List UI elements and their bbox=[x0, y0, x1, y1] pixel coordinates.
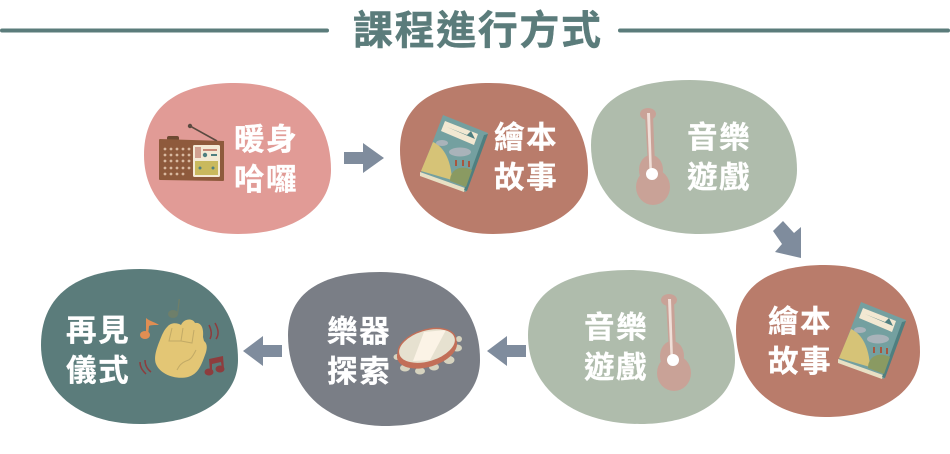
icon: faint note bbox=[168, 299, 180, 318]
title rule left bbox=[0, 28, 329, 32]
label: goodbye ritual: 儀式 bbox=[66, 354, 130, 388]
label: music game 2: 遊戲 bbox=[584, 351, 648, 385]
icon: book 2 bbox=[838, 302, 906, 379]
icon: ukulele 2 bbox=[657, 294, 691, 391]
step: instrument exploration bbox=[288, 272, 480, 426]
icon: radio bbox=[159, 124, 224, 181]
label: instrument exploration: 探索 bbox=[327, 355, 391, 389]
arrow: down-right bbox=[773, 221, 801, 258]
step: music game 2 bbox=[528, 270, 735, 424]
icon: orange note bbox=[140, 318, 159, 339]
step: warm-up greeting bbox=[144, 83, 331, 234]
blob: picture book 2 bbox=[736, 265, 920, 417]
icon: book bbox=[420, 115, 488, 192]
label: goodbye ritual: 再見 bbox=[66, 314, 130, 348]
title rule right bbox=[618, 28, 950, 32]
blob: picture book bbox=[400, 83, 588, 234]
label: picture book 2: 繪本 bbox=[768, 305, 832, 339]
blob: music game 2 bbox=[528, 270, 735, 424]
blob: goodbye ritual bbox=[41, 269, 238, 424]
arrow: right bbox=[344, 143, 384, 173]
label: warm-up: 暖身 bbox=[234, 123, 298, 157]
blob: music game bbox=[591, 80, 797, 234]
icon: ukulele bbox=[636, 108, 670, 205]
icon: tambourine bbox=[392, 322, 462, 375]
step: picture book bbox=[400, 83, 588, 234]
icon: motion lines right bbox=[209, 323, 218, 339]
label: picture book: 繪本 bbox=[494, 121, 558, 155]
label: picture book 2: 故事 bbox=[768, 345, 832, 379]
icon: motion lines left bbox=[140, 360, 151, 374]
icon: clapping hand bbox=[155, 319, 207, 378]
step: music game bbox=[591, 80, 797, 234]
arrow: left 1 bbox=[487, 336, 526, 366]
step: picture book 2 bbox=[736, 265, 920, 417]
step: goodbye ritual bbox=[41, 269, 238, 424]
label: music game: 音樂 bbox=[687, 121, 751, 155]
icon: red notes bbox=[204, 356, 224, 376]
label: music game: 遊戲 bbox=[687, 161, 751, 195]
title: 課程進行方式 bbox=[353, 9, 603, 53]
blob: instrument exploration bbox=[288, 272, 480, 426]
label: warm-up: 哈囉 bbox=[234, 163, 298, 197]
blob: warm-up bbox=[144, 83, 331, 234]
label: instrument exploration: 樂器 bbox=[327, 315, 391, 349]
arrow: left 2 bbox=[243, 336, 282, 366]
label: music game 2: 音樂 bbox=[584, 311, 648, 345]
label: picture book: 故事 bbox=[494, 161, 558, 195]
